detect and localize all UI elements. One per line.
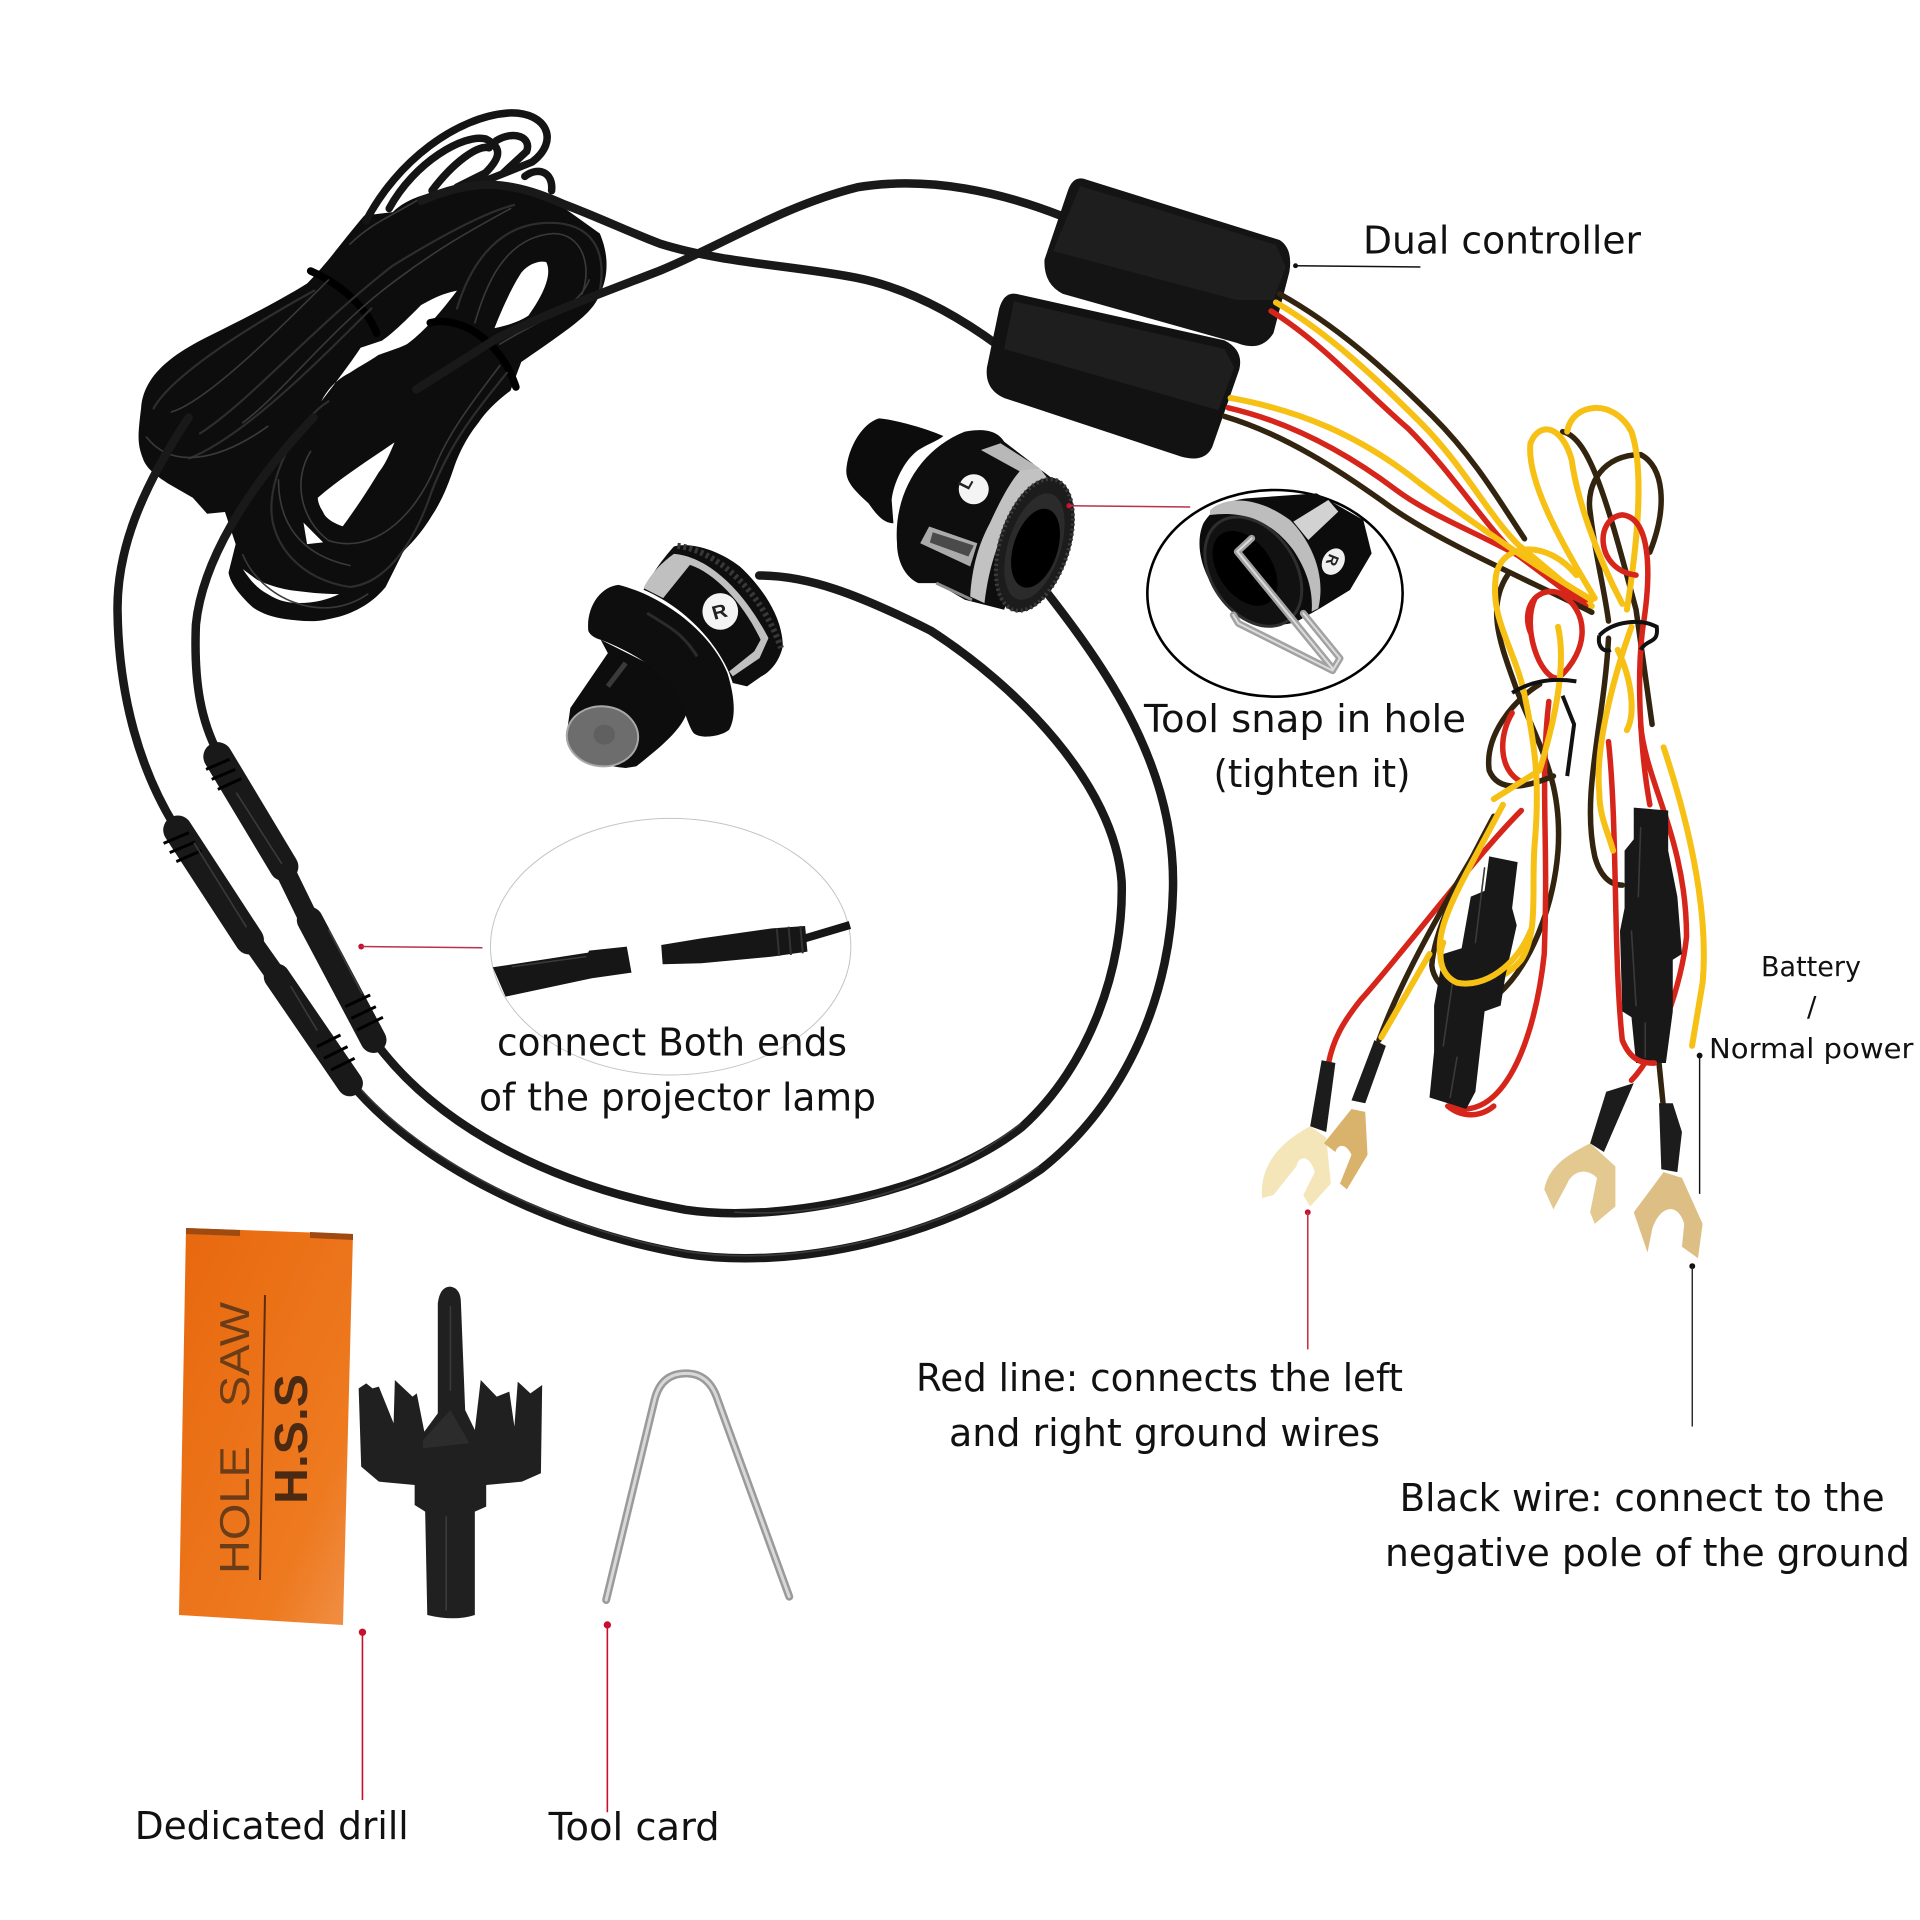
icon: left connector half [493, 947, 632, 997]
icon: ring terminal 4 [1634, 1103, 1703, 1258]
callout: connector detail bubble [490, 818, 851, 1075]
text: normal power: Normal power [1709, 1032, 1914, 1065]
text: dual controller: Dual controller [1363, 218, 1641, 262]
text: black wire 2: negative pole of the ground [1385, 1531, 1910, 1575]
callout: leader lines [358, 263, 1703, 1812]
icon: right projector lamp: R [710, 600, 731, 625]
text: tool snap line 2: (tighten it) [1214, 752, 1410, 796]
icon: hole saw drill bit [359, 1287, 542, 1618]
callout: tool snapped in lamp [1147, 490, 1403, 697]
icon: ring terminal 2 [1324, 1040, 1386, 1189]
icon: hole saw box: HOLE SAW [211, 1302, 258, 1574]
icon: right fuse holder [1620, 808, 1682, 1063]
icon: controller wires [1224, 294, 1592, 612]
icon: top loops [311, 113, 552, 387]
arrow: red line leader [1305, 1209, 1311, 1349]
icon: controller one [1044, 178, 1290, 346]
icon: left projector lamp: L [954, 474, 977, 492]
icon: inline connectors [164, 757, 383, 1083]
text: battery: Battery [1761, 950, 1861, 983]
icon: lamp seen from front [1185, 493, 1372, 645]
arrow: tool card leader [604, 1621, 611, 1812]
icon: coiled black cable bundle [139, 113, 607, 621]
icon: left harness wires [1329, 549, 1582, 1109]
text: dedicated drill: Dedicated drill [135, 1804, 409, 1848]
icon: wiring harness with fuses and terminals [1262, 408, 1704, 1258]
icon: right harness wires [1530, 408, 1704, 1109]
text: black wire 1: Black wire: connect to the [1400, 1476, 1885, 1520]
icon: cables from bundle to controllers [118, 183, 1173, 1258]
arrow: drill leader [359, 1629, 366, 1800]
arrow: connector leader [358, 944, 482, 949]
icon: hole saw box: H.S.S [265, 1374, 317, 1504]
text: connect both ends: connect Both ends [497, 1020, 847, 1064]
icon: left projector lamp [846, 418, 1089, 621]
text: tool card: Tool card [548, 1805, 720, 1849]
arrow: lamp leader [1066, 503, 1190, 508]
arrow: dual controller leader [1293, 263, 1420, 268]
icon: right connector half [661, 925, 850, 964]
arrow: black wire leader [1689, 1263, 1695, 1427]
text: slash: / [1807, 990, 1817, 1023]
icon: controller two [987, 294, 1240, 458]
icon: left fuse holder [1430, 856, 1530, 1115]
icon: dual controller boxes [987, 178, 1592, 612]
icon: ring terminal 1 [1262, 1060, 1335, 1207]
text: red line 2: and right ground wires [949, 1411, 1380, 1455]
icon: tool card metal clip [606, 1373, 789, 1600]
icon: hole saw box [179, 1228, 353, 1625]
arrow: battery leader [1697, 1053, 1703, 1194]
icon: ring terminal 3 [1544, 1083, 1634, 1224]
icon: right projector lamp [563, 545, 783, 771]
text: of the projector lamp: of the projector lamp [479, 1076, 876, 1120]
icon: lamp seen from front: R [1322, 551, 1342, 568]
text: red line 1: Red line: connects the left [916, 1356, 1403, 1400]
icon: bent metal tool [1233, 538, 1340, 671]
text: tool snap line 1: Tool snap in hole [1143, 697, 1466, 741]
